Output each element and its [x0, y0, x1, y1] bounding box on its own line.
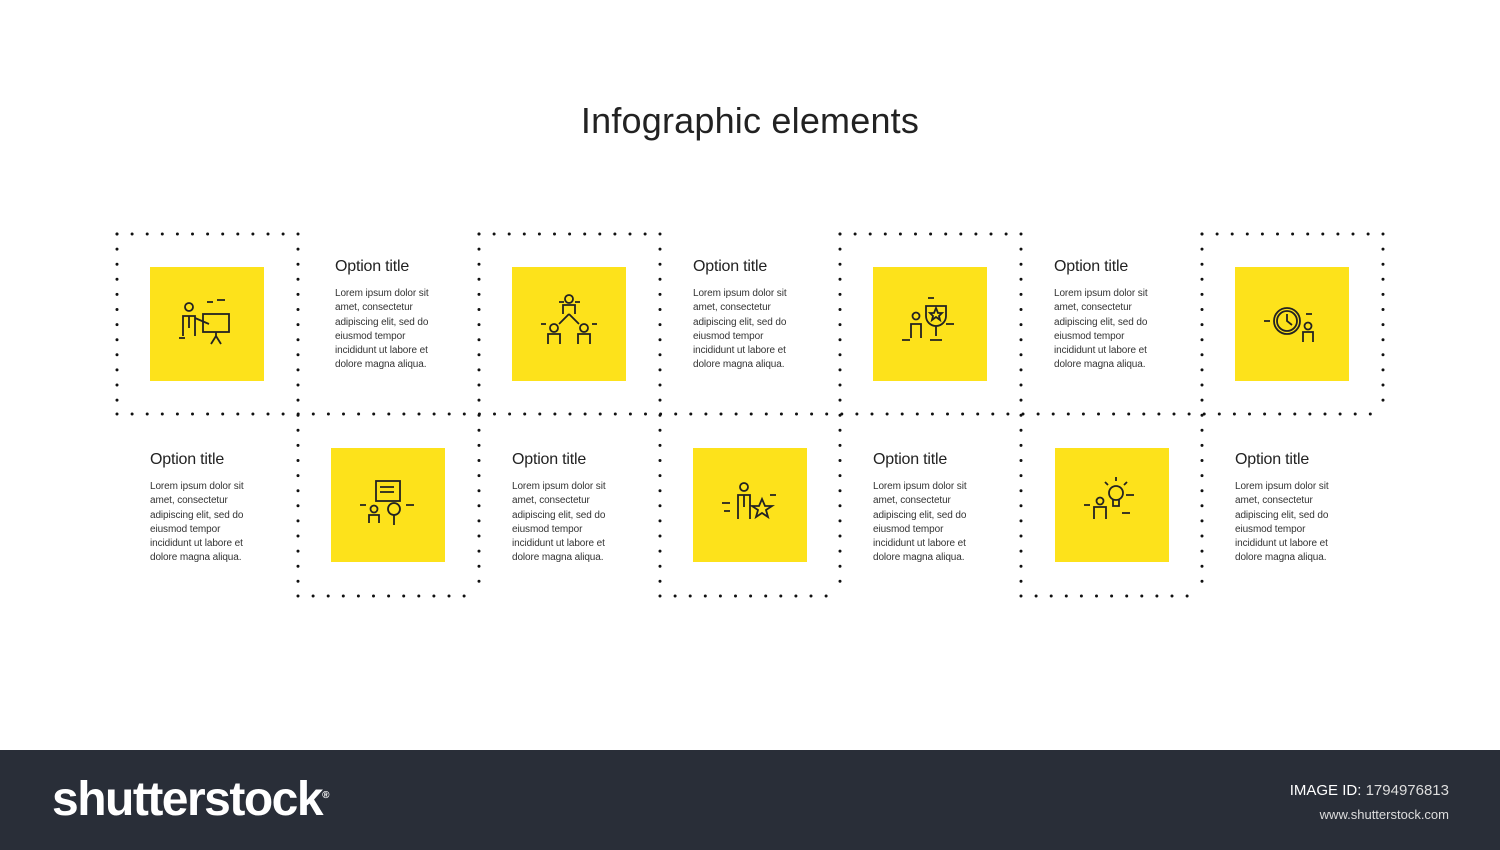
icon square: star person [693, 448, 807, 562]
text: bottom 2: eiusmod tempor [512, 524, 582, 535]
text: bottom 3: adipiscing elit, sed do [873, 510, 966, 521]
text: top 1: incididunt ut labore et [335, 345, 428, 356]
text: bottom 1: adipiscing elit, sed do [150, 510, 243, 521]
text: bottom 1: amet, consectetur [150, 495, 228, 506]
text: bottom 4 [1235, 451, 1329, 563]
text: bottom 2: dolore magna aliqua. [512, 552, 603, 563]
text: bottom 1: Lorem ipsum dolor sit [150, 481, 244, 492]
text: bottom 4: dolore magna aliqua. [1235, 552, 1326, 563]
text: top 3: Option title [1054, 258, 1128, 275]
text: top 2: Lorem ipsum dolor sit [693, 288, 786, 299]
text: bottom 4: incididunt ut labore et [1235, 538, 1328, 549]
text: top 2 [693, 258, 787, 370]
text: bottom 3: eiusmod tempor [873, 524, 943, 535]
text: bottom 2: amet, consectetur [512, 495, 590, 506]
text: bottom 1: incididunt ut labore et [150, 538, 243, 549]
text: top 3: dolore magna aliqua. [1054, 359, 1145, 370]
text: bottom 3: Option title [873, 451, 947, 468]
footer bar [0, 750, 1500, 850]
text: top 1 [335, 258, 429, 370]
text: bottom 2: Option title [512, 451, 586, 468]
icon square: team [512, 267, 626, 381]
text: bottom 4: Lorem ipsum dolor sit [1235, 481, 1328, 492]
text: top 2: amet, consectetur [693, 302, 771, 313]
text: top 2: dolore magna aliqua. [693, 359, 784, 370]
text: bottom 1 [150, 451, 244, 563]
text: bottom 2: Lorem ipsum dolor sit [512, 481, 606, 492]
text: bottom 4: Option title [1235, 451, 1309, 468]
text: top 1: Lorem ipsum dolor sit [335, 288, 428, 299]
text: bottom 4: adipiscing elit, sed do [1235, 510, 1328, 521]
text: top 3: Lorem ipsum dolor sit [1054, 288, 1148, 299]
title: Infographic elements [581, 100, 919, 141]
text: top 1: eiusmod tempor [335, 331, 405, 342]
text: bottom 1: Option title [150, 451, 224, 468]
text: top 3: incididunt ut labore et [1054, 345, 1147, 356]
text: top 1: amet, consectetur [335, 302, 413, 313]
text: bottom 2 [512, 451, 606, 563]
text: top 2: eiusmod tempor [693, 331, 763, 342]
text: bottom 3: incididunt ut labore et [873, 538, 966, 549]
icon square: idea [1055, 448, 1169, 562]
text: bottom 1: eiusmod tempor [150, 524, 220, 535]
footer image id: IMAGE ID: 1794976813 [1290, 782, 1449, 799]
text: top 1: Option title [335, 258, 409, 275]
text: bottom 3: Lorem ipsum dolor sit [873, 481, 966, 492]
icon square: search document [331, 448, 445, 562]
text: bottom 4: amet, consectetur [1235, 495, 1313, 506]
text: bottom 1: dolore magna aliqua. [150, 552, 241, 563]
icon square: presentation [150, 267, 264, 381]
text: top 3: eiusmod tempor [1054, 331, 1124, 342]
text: bottom 2: incididunt ut labore et [512, 538, 605, 549]
text: top 1: dolore magna aliqua. [335, 359, 426, 370]
text: bottom 3 [873, 451, 967, 563]
icon square: clock [1235, 267, 1349, 381]
text: top 3: adipiscing elit, sed do [1054, 317, 1147, 328]
text: top 2: Option title [693, 258, 767, 275]
text: top 3 [1054, 258, 1148, 370]
footer logo: shutterstock® [52, 773, 328, 826]
text: bottom 3: dolore magna aliqua. [873, 552, 964, 563]
text: top 1: adipiscing elit, sed do [335, 317, 428, 328]
icon square: trophy [873, 267, 987, 381]
text: bottom 3: amet, consectetur [873, 495, 951, 506]
text: top 3: amet, consectetur [1054, 302, 1132, 313]
text: bottom 4: eiusmod tempor [1235, 524, 1305, 535]
footer image id [1290, 782, 1449, 822]
text: top 2: incididunt ut labore et [693, 345, 786, 356]
footer image id: www.shutterstock.com [1320, 807, 1449, 822]
text: bottom 2: adipiscing elit, sed do [512, 510, 605, 521]
text: top 2: adipiscing elit, sed do [693, 317, 786, 328]
